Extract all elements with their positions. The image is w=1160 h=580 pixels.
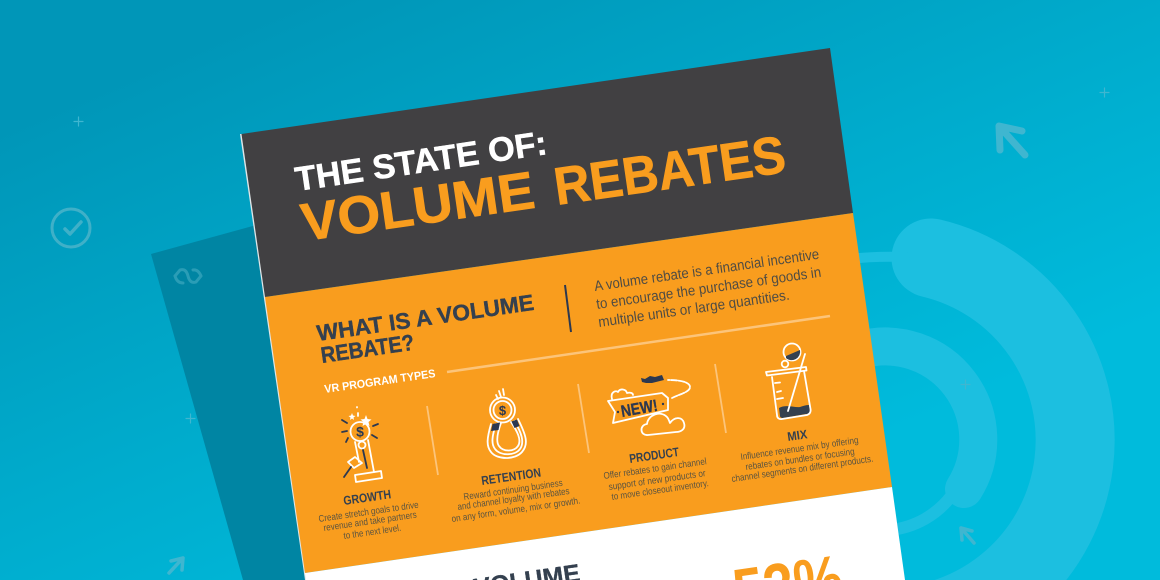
divider [565, 285, 571, 332]
description: growth: to the next level. [343, 523, 402, 542]
description: retention [451, 478, 581, 525]
icon: magnet: $ [499, 403, 507, 418]
poster edge highlight [240, 134, 307, 580]
definition text [593, 247, 822, 331]
description: retention: Reward continuing business [463, 478, 564, 503]
icon: arrow top right [999, 126, 1025, 155]
definition text: multiple units or large quantities. [597, 288, 791, 331]
icon: arrow bottom right [961, 528, 974, 543]
icon: check circle [52, 209, 90, 247]
column: retention [451, 389, 581, 525]
heading: what is a volume rebate: REBATE? [319, 330, 416, 368]
plus marks [74, 88, 1109, 423]
description: product: to move closeout inventory. [611, 478, 709, 503]
icon: plane with banner: NEW! [620, 397, 659, 421]
icon: arrow bottom left [169, 558, 183, 573]
description: product: support of new products or [608, 468, 706, 493]
description: mix: Influence revenue mix by offering [740, 435, 859, 463]
title: THE STATE OF: [293, 124, 549, 199]
rule [447, 316, 830, 372]
label: growth: GROWTH [342, 487, 392, 508]
description: growth [318, 500, 419, 542]
column: mix [731, 344, 874, 485]
icon: beaker [766, 344, 811, 419]
column: product [603, 375, 709, 503]
description: mix [731, 435, 874, 485]
description: product: Offer rebates to gain channel [603, 456, 707, 482]
description: mix: channel segments on different products. [731, 454, 874, 485]
definition text: to encourage the purchase of goods in [595, 265, 822, 313]
description: growth: revenue and take partners [323, 510, 418, 534]
title [293, 124, 789, 253]
description: retention: and channel loyalty with rebates [457, 486, 570, 513]
subheading: VR program types: VR PROGRAM TYPES [324, 368, 437, 396]
icon: high striker: $ [356, 424, 364, 440]
title: VOLUME [297, 161, 538, 253]
column dividers [427, 364, 726, 475]
column: growth [318, 407, 419, 542]
label: retention: RETENTION [480, 466, 542, 488]
definition text: A volume rebate is a financial incentive [593, 247, 820, 295]
description: product [603, 456, 709, 503]
description: growth: Create stretch goals to drive [318, 500, 419, 525]
icon: loop [175, 270, 201, 283]
panel: header band [242, 48, 853, 297]
label: mix: MIX [786, 427, 809, 444]
heading: what is a volume rebate: WHAT IS A VOLUME [315, 290, 535, 346]
panel: white section [305, 487, 905, 580]
title: REBATES [550, 125, 789, 217]
background rings [850, 257, 1075, 580]
back sheet shadow [151, 224, 310, 580]
description: mix: rebates on bundles or focusing [745, 446, 855, 473]
description: retention: on any form, volume, mix or growth. [451, 496, 581, 525]
panel: orange band [265, 213, 892, 573]
label: product: PRODUCT [628, 445, 680, 466]
